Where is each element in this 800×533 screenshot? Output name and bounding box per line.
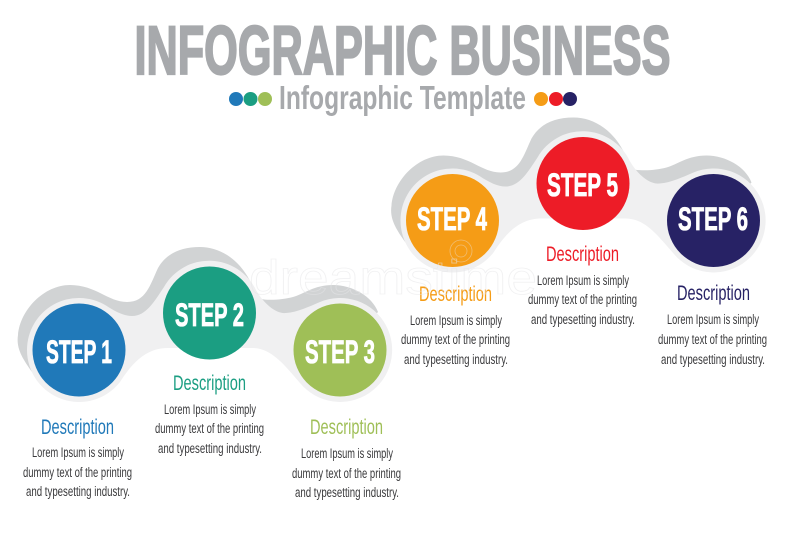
step 6: STEP 6: [678, 201, 748, 237]
step 1: and typesetting industry.: [26, 484, 130, 499]
light ribbon: [27, 261, 392, 402]
step 1: Description: [41, 416, 114, 439]
step 5: STEP 5: [547, 167, 618, 203]
step 6: Description: [677, 282, 750, 305]
step 2: STEP 2: [175, 297, 244, 333]
step 6: Lorem Ipsum is simply: [667, 312, 759, 327]
step 3: dummy text of the printing: [292, 466, 401, 481]
step 2: [155, 266, 264, 456]
light ribbon: [400, 131, 766, 273]
step 5: Lorem Ipsum is simply: [537, 273, 629, 288]
step 3: STEP 3: [305, 334, 375, 370]
panel: steps 1 to 3 backdrop: [18, 247, 392, 402]
grey shadow ribbon: [18, 247, 378, 372]
panel: steps 4 to 6 backdrop: [391, 118, 766, 273]
step 2: and typesetting industry.: [158, 441, 262, 456]
grey shadow ribbon: [391, 118, 752, 242]
step 1: dummy text of the printing: [23, 465, 132, 480]
step 1: [23, 304, 132, 499]
step 4: Lorem Ipsum is simply: [410, 313, 502, 328]
subtitle row: Infographic Template: [279, 79, 526, 116]
step 3: [292, 304, 401, 500]
step 4: and typesetting industry.: [404, 352, 508, 367]
step 5: dummy text of the printing: [528, 292, 637, 307]
step 3: and typesetting industry.: [295, 485, 399, 500]
step 5: [528, 137, 637, 327]
step 5: and typesetting industry.: [531, 312, 635, 327]
step 4: dummy text of the printing: [401, 332, 510, 347]
watermark: dreamstime: [249, 252, 537, 305]
step 2: Description: [173, 372, 246, 395]
step 5: Description: [546, 243, 619, 266]
step 4: Description: [419, 283, 492, 306]
step 4: [401, 174, 510, 367]
step 1: Lorem Ipsum is simply: [32, 445, 124, 460]
step 1: STEP 1: [46, 334, 112, 370]
step 2: dummy text of the printing: [155, 421, 264, 436]
step 2: Lorem Ipsum is simply: [164, 402, 256, 417]
step 4: STEP 4: [417, 201, 487, 237]
step 3: Description: [310, 416, 383, 439]
step 6: [658, 174, 767, 367]
step 3: Lorem Ipsum is simply: [301, 446, 393, 461]
